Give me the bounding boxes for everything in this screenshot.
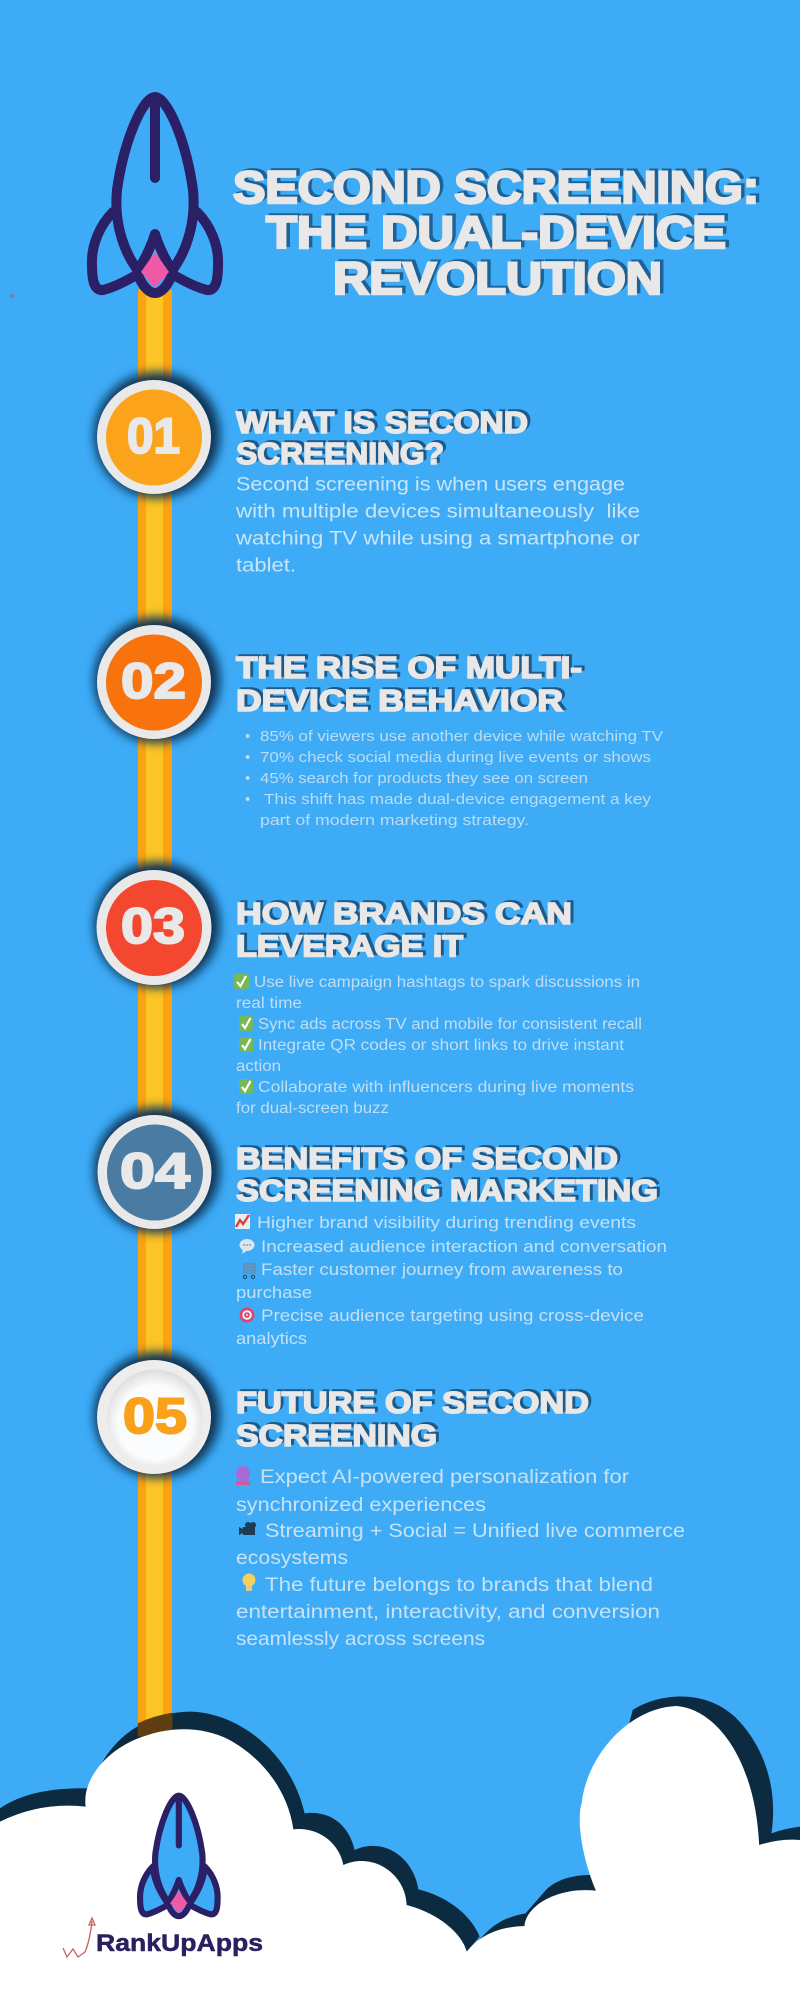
bullet list	[245, 728, 663, 829]
text: benefits list	[236, 1213, 667, 1348]
heading 1: WHAT IS SECOND	[236, 405, 528, 440]
heading 2: THE RISE OF MULTI-	[236, 650, 582, 685]
icon: target	[240, 1308, 254, 1322]
text: definition: Second screening is when users engage	[236, 474, 625, 496]
section 4: benefits	[235, 1141, 667, 1348]
text: tactics list: real time	[236, 995, 302, 1012]
heading 1	[236, 405, 528, 471]
text: tactics list: Collaborate with influencers during live moments	[258, 1079, 634, 1096]
badge 03: 03	[121, 898, 185, 954]
title: REVOLUTION	[333, 253, 662, 304]
title: SECOND SCREENING:	[233, 162, 759, 213]
bullet list: 45% search for products they see on screen	[260, 770, 588, 787]
bullet list: 85% of viewers use another device while watching TV	[260, 728, 663, 745]
icon: growth arrow	[63, 1918, 95, 1957]
heading 2: DEVICE BEHAVIOR	[236, 683, 563, 718]
heading 4: SCREENING MARKETING	[236, 1173, 658, 1208]
bullet list: •	[245, 728, 250, 745]
text: future list: Expect AI-powered personalization for	[260, 1466, 630, 1488]
logo text: RankUpApps	[96, 1930, 263, 1957]
icon: shopping cart	[243, 1263, 256, 1279]
text: tactics list: action	[236, 1058, 281, 1075]
text: future list: synchronized experiences	[236, 1494, 486, 1516]
text: benefits list: Precise audience targeting using cross-device	[261, 1306, 644, 1325]
heading 4	[236, 1141, 658, 1208]
bullet list: •	[245, 770, 250, 787]
logo: RankUpApps	[63, 1796, 263, 1957]
icon: crystal ball	[236, 1466, 250, 1485]
text: benefits list: analytics	[236, 1329, 307, 1348]
icon: check 1	[234, 974, 249, 989]
text: tactics list	[236, 974, 642, 1117]
text: definition: with multiple devices simultaneously like	[235, 500, 640, 522]
text: future list: seamlessly across screens	[236, 1628, 485, 1650]
heading 1: SCREENING?	[236, 436, 444, 471]
title: THE DUAL-DEVICE	[266, 207, 726, 258]
heading 3: LEVERAGE IT	[236, 928, 463, 964]
badge 03	[94, 862, 220, 988]
text: tactics list: for dual-screen buzz	[236, 1100, 389, 1117]
heading 5: FUTURE OF SECOND	[236, 1385, 589, 1420]
badge 02: 02	[121, 653, 186, 709]
heading 4: BENEFITS OF SECOND	[236, 1141, 618, 1176]
badge 01: 01	[127, 408, 180, 464]
text: tactics list: Integrate QR codes or short links to drive instant	[258, 1037, 625, 1054]
text: future list: Streaming + Social = Unified live commerce	[265, 1520, 685, 1542]
text: benefits list: Faster customer journey from awareness to	[261, 1260, 623, 1279]
heading 5	[236, 1385, 589, 1453]
icon: check 2	[239, 1016, 253, 1031]
text: benefits list: Higher brand visibility during trending events	[257, 1213, 636, 1232]
badge 02	[94, 617, 220, 743]
text: tactics list: Use live campaign hashtags to spark discussions in	[254, 974, 640, 991]
heading 2	[236, 650, 582, 718]
section 2: rise of multi-device behavior	[236, 650, 663, 829]
icon: speech bubble	[240, 1239, 254, 1254]
text: tactics list: Sync ads across TV and mobile for consistent recall	[258, 1016, 642, 1033]
text: benefits list: Increased audience interaction and conversation	[261, 1237, 667, 1256]
text: definition: tablet.	[236, 554, 296, 576]
section 1: what is second screening	[235, 405, 641, 576]
icon: chart	[235, 1214, 250, 1229]
section 5: future	[236, 1385, 685, 1650]
small dot	[11, 294, 14, 298]
text: definition: watching TV while using a smartphone or	[235, 528, 641, 550]
bullet list: 70% check social media during live events or shows	[260, 749, 651, 766]
text: future list: entertainment, interactivity, and conversion	[236, 1601, 660, 1623]
badge 01	[94, 372, 220, 498]
clouds	[0, 1696, 800, 2000]
icon: check 4	[239, 1079, 253, 1094]
badge 05	[94, 1352, 220, 1478]
bullet list: •	[245, 791, 250, 808]
heading 5: SCREENING	[236, 1418, 437, 1453]
flame trail bar	[138, 290, 172, 1740]
badge 05: 05	[123, 1388, 187, 1444]
bullet list: part of modern marketing strategy.	[260, 812, 529, 829]
title	[233, 162, 759, 304]
text: future list	[236, 1466, 685, 1650]
heading 3	[236, 896, 572, 964]
badge 04	[94, 1107, 220, 1233]
badge 04: 04	[120, 1143, 190, 1199]
icon: light bulb	[242, 1574, 256, 1591]
icon: movie camera	[239, 1522, 256, 1535]
bullet list: •	[245, 749, 250, 766]
icon: rocket	[92, 97, 218, 293]
heading 3: HOW BRANDS CAN	[236, 896, 572, 931]
text: benefits list: purchase	[236, 1283, 312, 1302]
icon: check 3	[239, 1037, 253, 1052]
bullet list: This shift has made dual-device engagement a key	[264, 791, 652, 808]
section 3: how brands can leverage it	[234, 896, 642, 1117]
text: future list: ecosystems	[236, 1547, 348, 1569]
text: future list: The future belongs to brands that blend	[265, 1574, 653, 1596]
text: definition	[235, 474, 641, 576]
icon: logo rocket	[140, 1796, 218, 1916]
